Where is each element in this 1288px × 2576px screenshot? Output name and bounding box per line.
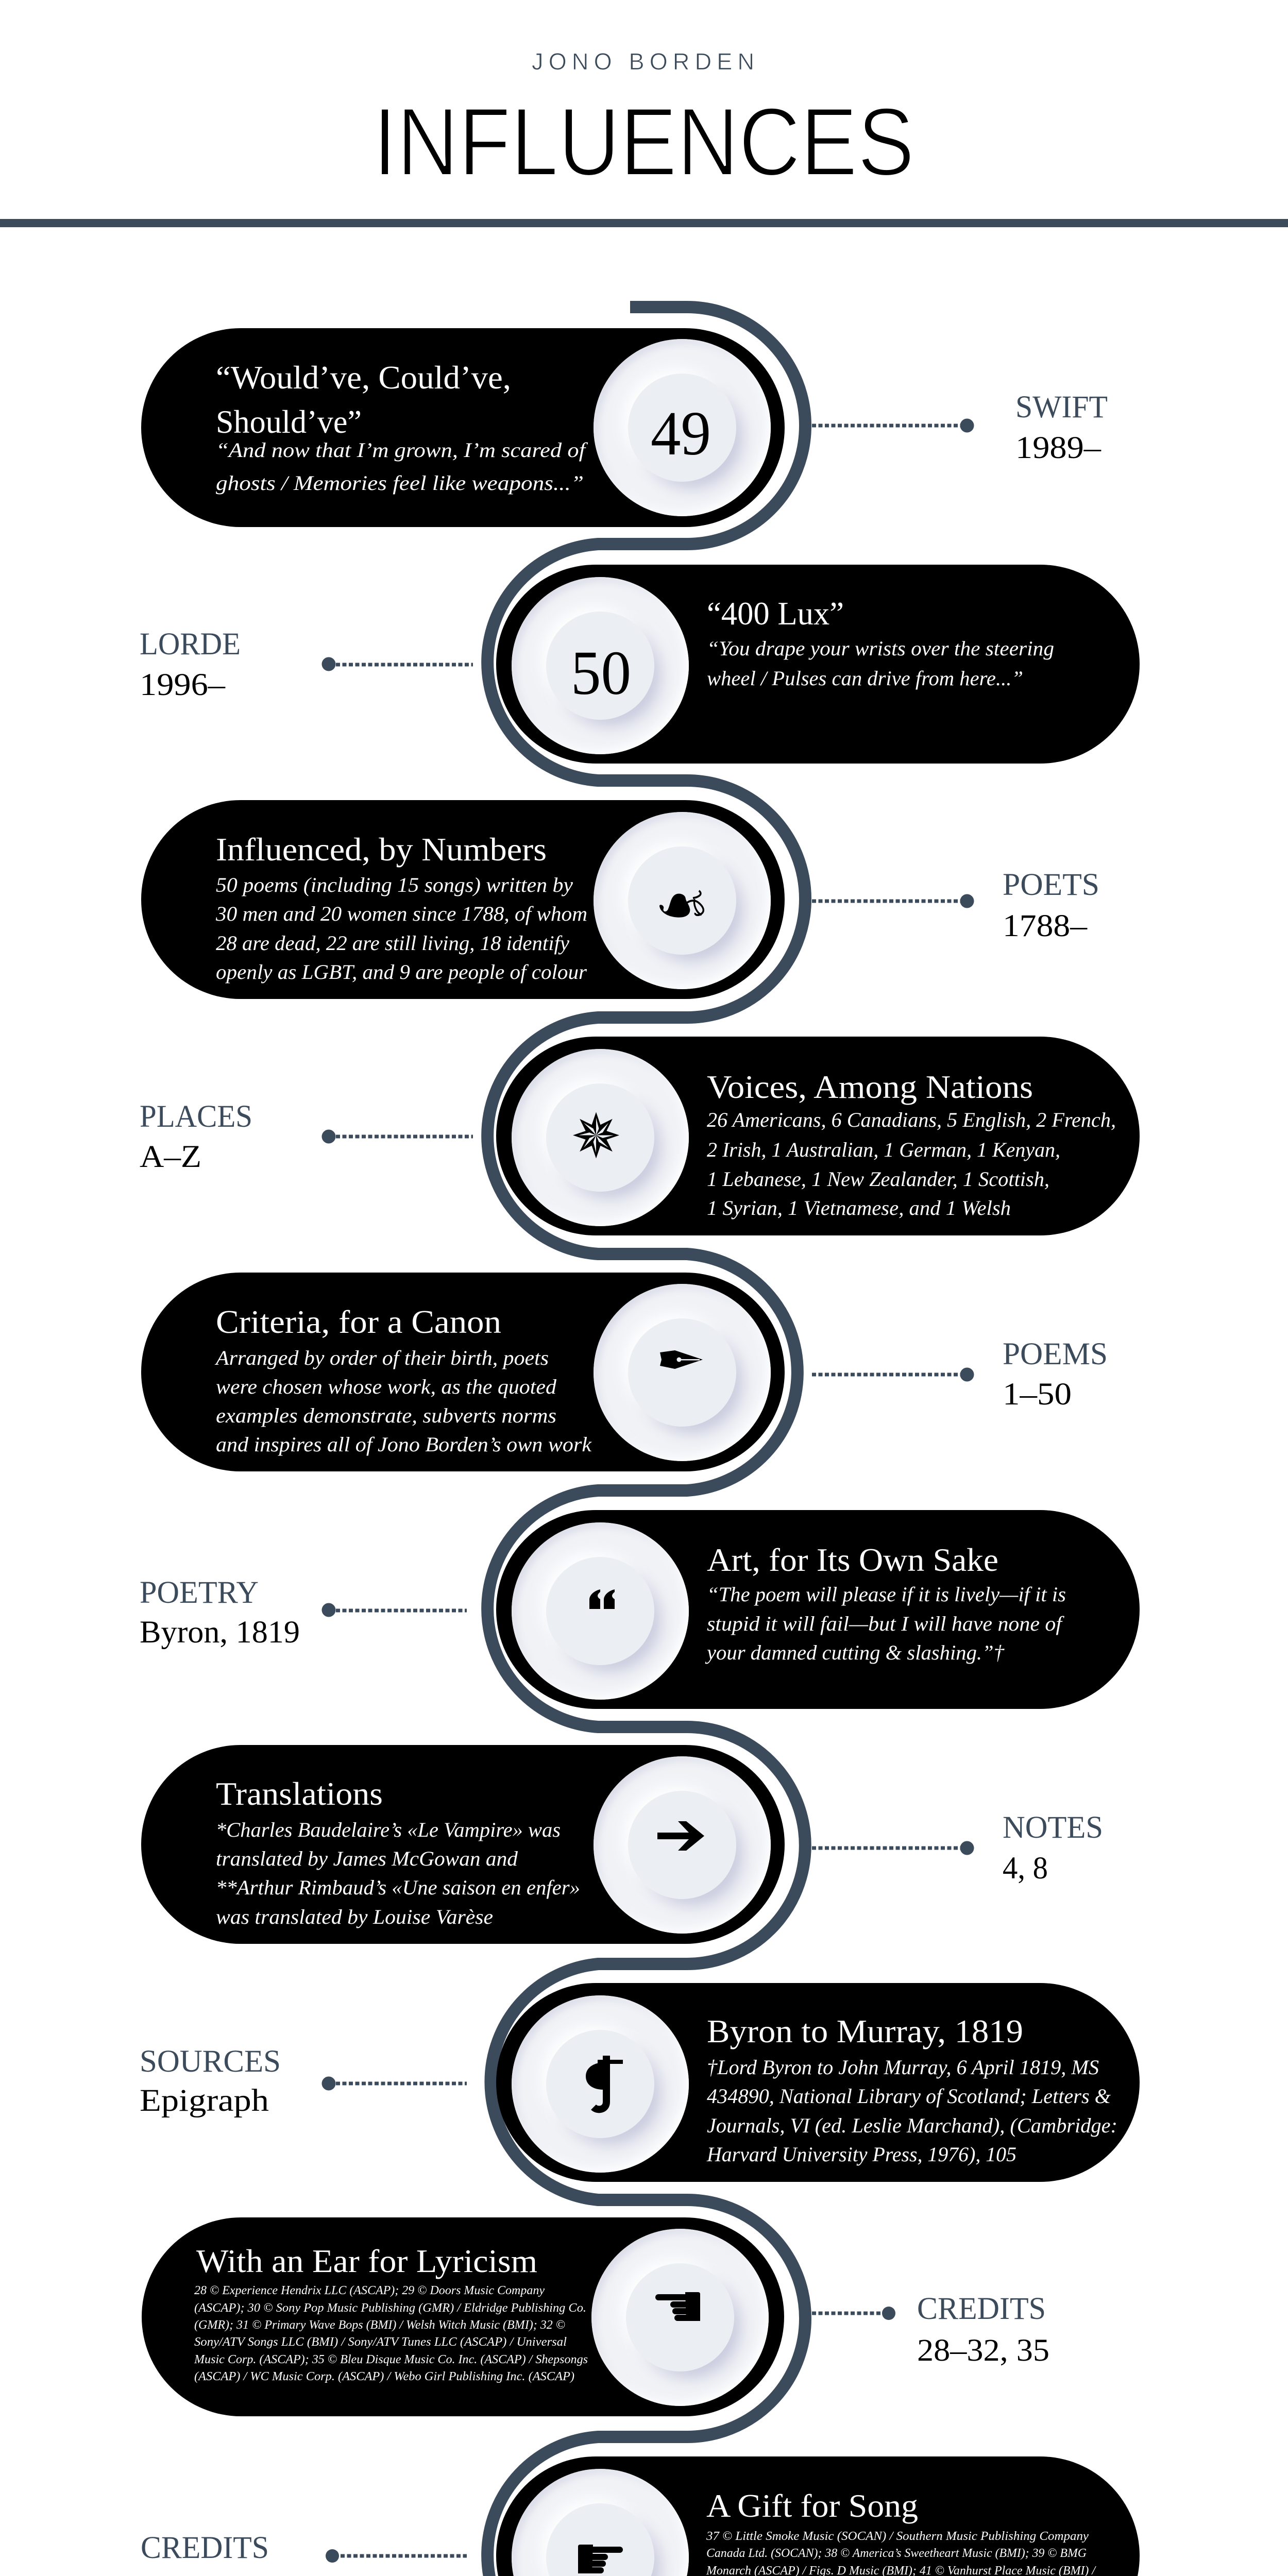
body text: 30 men and 20 women since 1788, of whom: [215, 902, 587, 925]
side label: POETRY: [140, 1575, 259, 1610]
plate: [499, 1983, 701, 2185]
quote: wheel / Pulses can drive from here...”: [707, 667, 1023, 690]
connector: [812, 894, 974, 908]
heading: Influenced, by Numbers: [216, 831, 547, 868]
heading: [216, 359, 511, 440]
icon: pen nib: [660, 1350, 703, 1369]
icon: quotation mark: [589, 1589, 615, 1609]
panel: voices among nations: [140, 1037, 1140, 1239]
plate: [581, 1744, 783, 1946]
side label: [917, 2292, 1049, 2368]
connector: [812, 1367, 974, 1382]
credits text: 28 © Experience Hendrix LLC (ASCAP); 29 © Doors Music Company: [194, 2284, 545, 2297]
side label: SOURCES: [140, 2044, 281, 2079]
quote: stupid it will fail—but I will have none of: [707, 1612, 1064, 1635]
pill: [142, 2217, 784, 2416]
body text: was translated by Louise Varèse: [216, 1905, 493, 1928]
body text: Journals, VI (ed. Leslie Marchand), (Cambridge:: [707, 2114, 1117, 2137]
credits text: (GMR); 31 © Primary Wave Bops (BMI) / Welsh Witch Music (BMI); 32 ©: [194, 2318, 565, 2332]
body text: examples demonstrate, subverts norms: [216, 1404, 556, 1427]
quote: “You drape your wrists over the steering: [707, 637, 1054, 660]
connector: [326, 2549, 467, 2563]
body text: 50 poems (including 15 songs) written by: [216, 873, 573, 896]
icon: hand pointing right: [578, 2545, 623, 2573]
body text: [215, 873, 587, 984]
side label: Byron, 1819: [140, 1615, 300, 1650]
plate: [581, 800, 783, 1002]
heading: “400 Lux”: [707, 595, 844, 632]
connector: [321, 1603, 467, 1617]
credits text: Sony/ATV Songs LLC (BMI) / Sony/ATV Tunes LLC (ASCAP) / Universal: [194, 2335, 567, 2349]
body text: Arranged by order of their birth, poets: [214, 1346, 549, 1369]
side label: POETS: [1003, 868, 1099, 902]
heading: “Would’ve, Could’ve,: [216, 359, 511, 396]
number 50: 50: [571, 638, 631, 708]
quote: your damned cutting & slashing.”†: [705, 1641, 1005, 1664]
side label: A–Z: [140, 1140, 201, 1174]
body text: openly as LGBT, and 9 are people of colour: [216, 960, 587, 984]
pill: [141, 328, 785, 527]
header rule: [0, 219, 1288, 227]
plate: [499, 565, 701, 767]
connector: [812, 418, 974, 433]
credits text: 37 © Little Smoke Music (SOCAN) / Southern Music Publishing Company: [706, 2530, 1089, 2543]
body text: 28 are dead, 22 are still living, 18 identify: [216, 931, 569, 955]
side label: [1015, 390, 1108, 465]
icon: ornamental paragraph sign: [586, 2056, 623, 2109]
body text: 1 Syrian, 1 Vietnamese, and 1 Welsh: [707, 1196, 1011, 1219]
body text: 26 Americans, 6 Canadians, 5 English, 2 French,: [707, 1108, 1116, 1131]
title: INFLUENCES: [373, 88, 914, 196]
body text: 2 Irish, 1 Australian, 1 German, 1 Kenyan,: [707, 1138, 1060, 1161]
body text: [706, 2056, 1117, 2166]
body text: [214, 1346, 592, 1456]
body text: †Lord Byron to John Murray, 6 April 1819, MS: [707, 2056, 1099, 2079]
panel: a gift for song: [141, 2456, 1140, 2576]
panel: would've could've: [141, 327, 1108, 529]
plate: [499, 2456, 701, 2576]
credits text: [194, 2284, 588, 2383]
body text: 434890, National Library of Scotland; Letters &: [707, 2084, 1111, 2108]
connector: [321, 2076, 467, 2091]
side label: [140, 1099, 252, 1174]
panel: 400 lux: [140, 565, 1140, 767]
heading: A Gift for Song: [706, 2487, 918, 2524]
heading: Art, for Its Own Sake: [707, 1541, 998, 1578]
quote: [707, 637, 1054, 690]
side label: 28–32, 35: [917, 2333, 1049, 2368]
side label: 1788–: [1003, 909, 1088, 943]
body text: **Arthur Rimbaud’s «Une saison en enfer»: [216, 1876, 580, 1899]
heading: Criteria, for a Canon: [216, 1303, 501, 1340]
heading: With an Ear for Lyricism: [196, 2243, 537, 2279]
side label: [140, 1575, 300, 1650]
pill: [141, 1273, 785, 1471]
quote: [216, 438, 588, 495]
connector: [812, 1841, 974, 1855]
side label: 1–50: [1003, 1377, 1072, 1412]
connector: [321, 657, 473, 671]
plate: [581, 1272, 783, 1473]
side label: [1003, 1337, 1108, 1412]
side label: [140, 627, 241, 702]
side label: [1003, 1810, 1103, 1886]
panel: with an ear for lyricism: [142, 2216, 1049, 2418]
icon: star: [573, 1112, 619, 1158]
side label: POEMS: [1003, 1337, 1108, 1371]
body text: translated by James McGowan and: [216, 1847, 518, 1870]
credits text: (ASCAP) / WC Music Corp. (ASCAP) / Webo Girl Publishing Inc. (ASCAP): [194, 2370, 574, 2383]
body text: and inspires all of Jono Borden’s own work: [216, 1433, 592, 1456]
pill: [496, 565, 1140, 764]
pill: [141, 1745, 785, 1944]
side label: CREDITS: [917, 2292, 1046, 2326]
quote: “The poem will please if it is lively—if it is: [707, 1583, 1066, 1606]
side label: 1996–: [140, 668, 226, 702]
plate: [499, 1037, 701, 1239]
body text: [216, 1818, 580, 1928]
side label: PLACES: [140, 1099, 252, 1134]
side label: 1989–: [1015, 431, 1101, 465]
body text: 1 Lebanese, 1 New Zealander, 1 Scottish,: [707, 1167, 1049, 1191]
pill: [496, 2456, 1140, 2576]
panel: translations: [141, 1744, 1103, 1946]
side label: 4, 8: [1003, 1851, 1048, 1886]
side label: [140, 2044, 281, 2118]
body text: *Charles Baudelaire’s «Le Vampire» was: [216, 1818, 561, 1841]
credits text: Canada Ltd. (SOCAN); 38 © America’s Sweetheart Music (BMI); 39 © BMG: [706, 2547, 1087, 2560]
icon: arrow: [657, 1821, 704, 1851]
quote: “And now that I’m grown, I’m scared of: [216, 438, 588, 462]
side label: CREDITS: [141, 2531, 269, 2565]
panel: art for its own sake: [140, 1510, 1140, 1712]
quote: ghosts / Memories feel like weapons...”: [216, 471, 584, 495]
credits text: [705, 2530, 1115, 2576]
panel: byron to murray: [140, 1983, 1140, 2185]
side label: Epigraph: [140, 2083, 269, 2118]
body text: were chosen whose work, as the quoted: [216, 1375, 557, 1398]
plate: [499, 1510, 701, 1712]
plate: [579, 2216, 781, 2418]
pill: [496, 1983, 1140, 2182]
credits text: (ASCAP); 30 © Sony Pop Music Publishing (GMR) / Eldridge Publishing Co.: [194, 2301, 586, 2315]
icon: hand pointing left: [655, 2292, 700, 2321]
serpentine ribbon: [480, 307, 805, 2576]
heading: Translations: [216, 1775, 383, 1812]
connector: [812, 2307, 895, 2320]
pill: [141, 800, 785, 999]
number 49: 49: [651, 399, 711, 468]
panel: influenced by numbers: [141, 800, 1099, 1002]
quote: [705, 1583, 1066, 1664]
panel: criteria for a canon: [141, 1272, 1108, 1473]
credits text: Music Corp. (ASCAP); 35 © Bleu Disque Music Co. Inc. (ASCAP) / Shepsongs: [194, 2353, 588, 2366]
body text: [707, 1108, 1116, 1219]
connector: [321, 1129, 473, 1144]
heading: Byron to Murray, 1819: [707, 2013, 1023, 2049]
plate: [581, 327, 783, 529]
side label: NOTES: [1003, 1810, 1103, 1845]
side label: LORDE: [140, 627, 241, 662]
side label: SWIFT: [1015, 390, 1108, 425]
pill: [496, 1037, 1140, 1235]
heading: Voices, Among Nations: [707, 1069, 1033, 1105]
side label: [1003, 868, 1099, 943]
heading: Should’ve”: [216, 403, 362, 440]
pill: [496, 1510, 1140, 1709]
author name: JONO BORDEN: [532, 48, 754, 75]
body text: Harvard University Press, 1976), 105: [706, 2143, 1016, 2166]
icon: fleuron: [659, 891, 703, 918]
